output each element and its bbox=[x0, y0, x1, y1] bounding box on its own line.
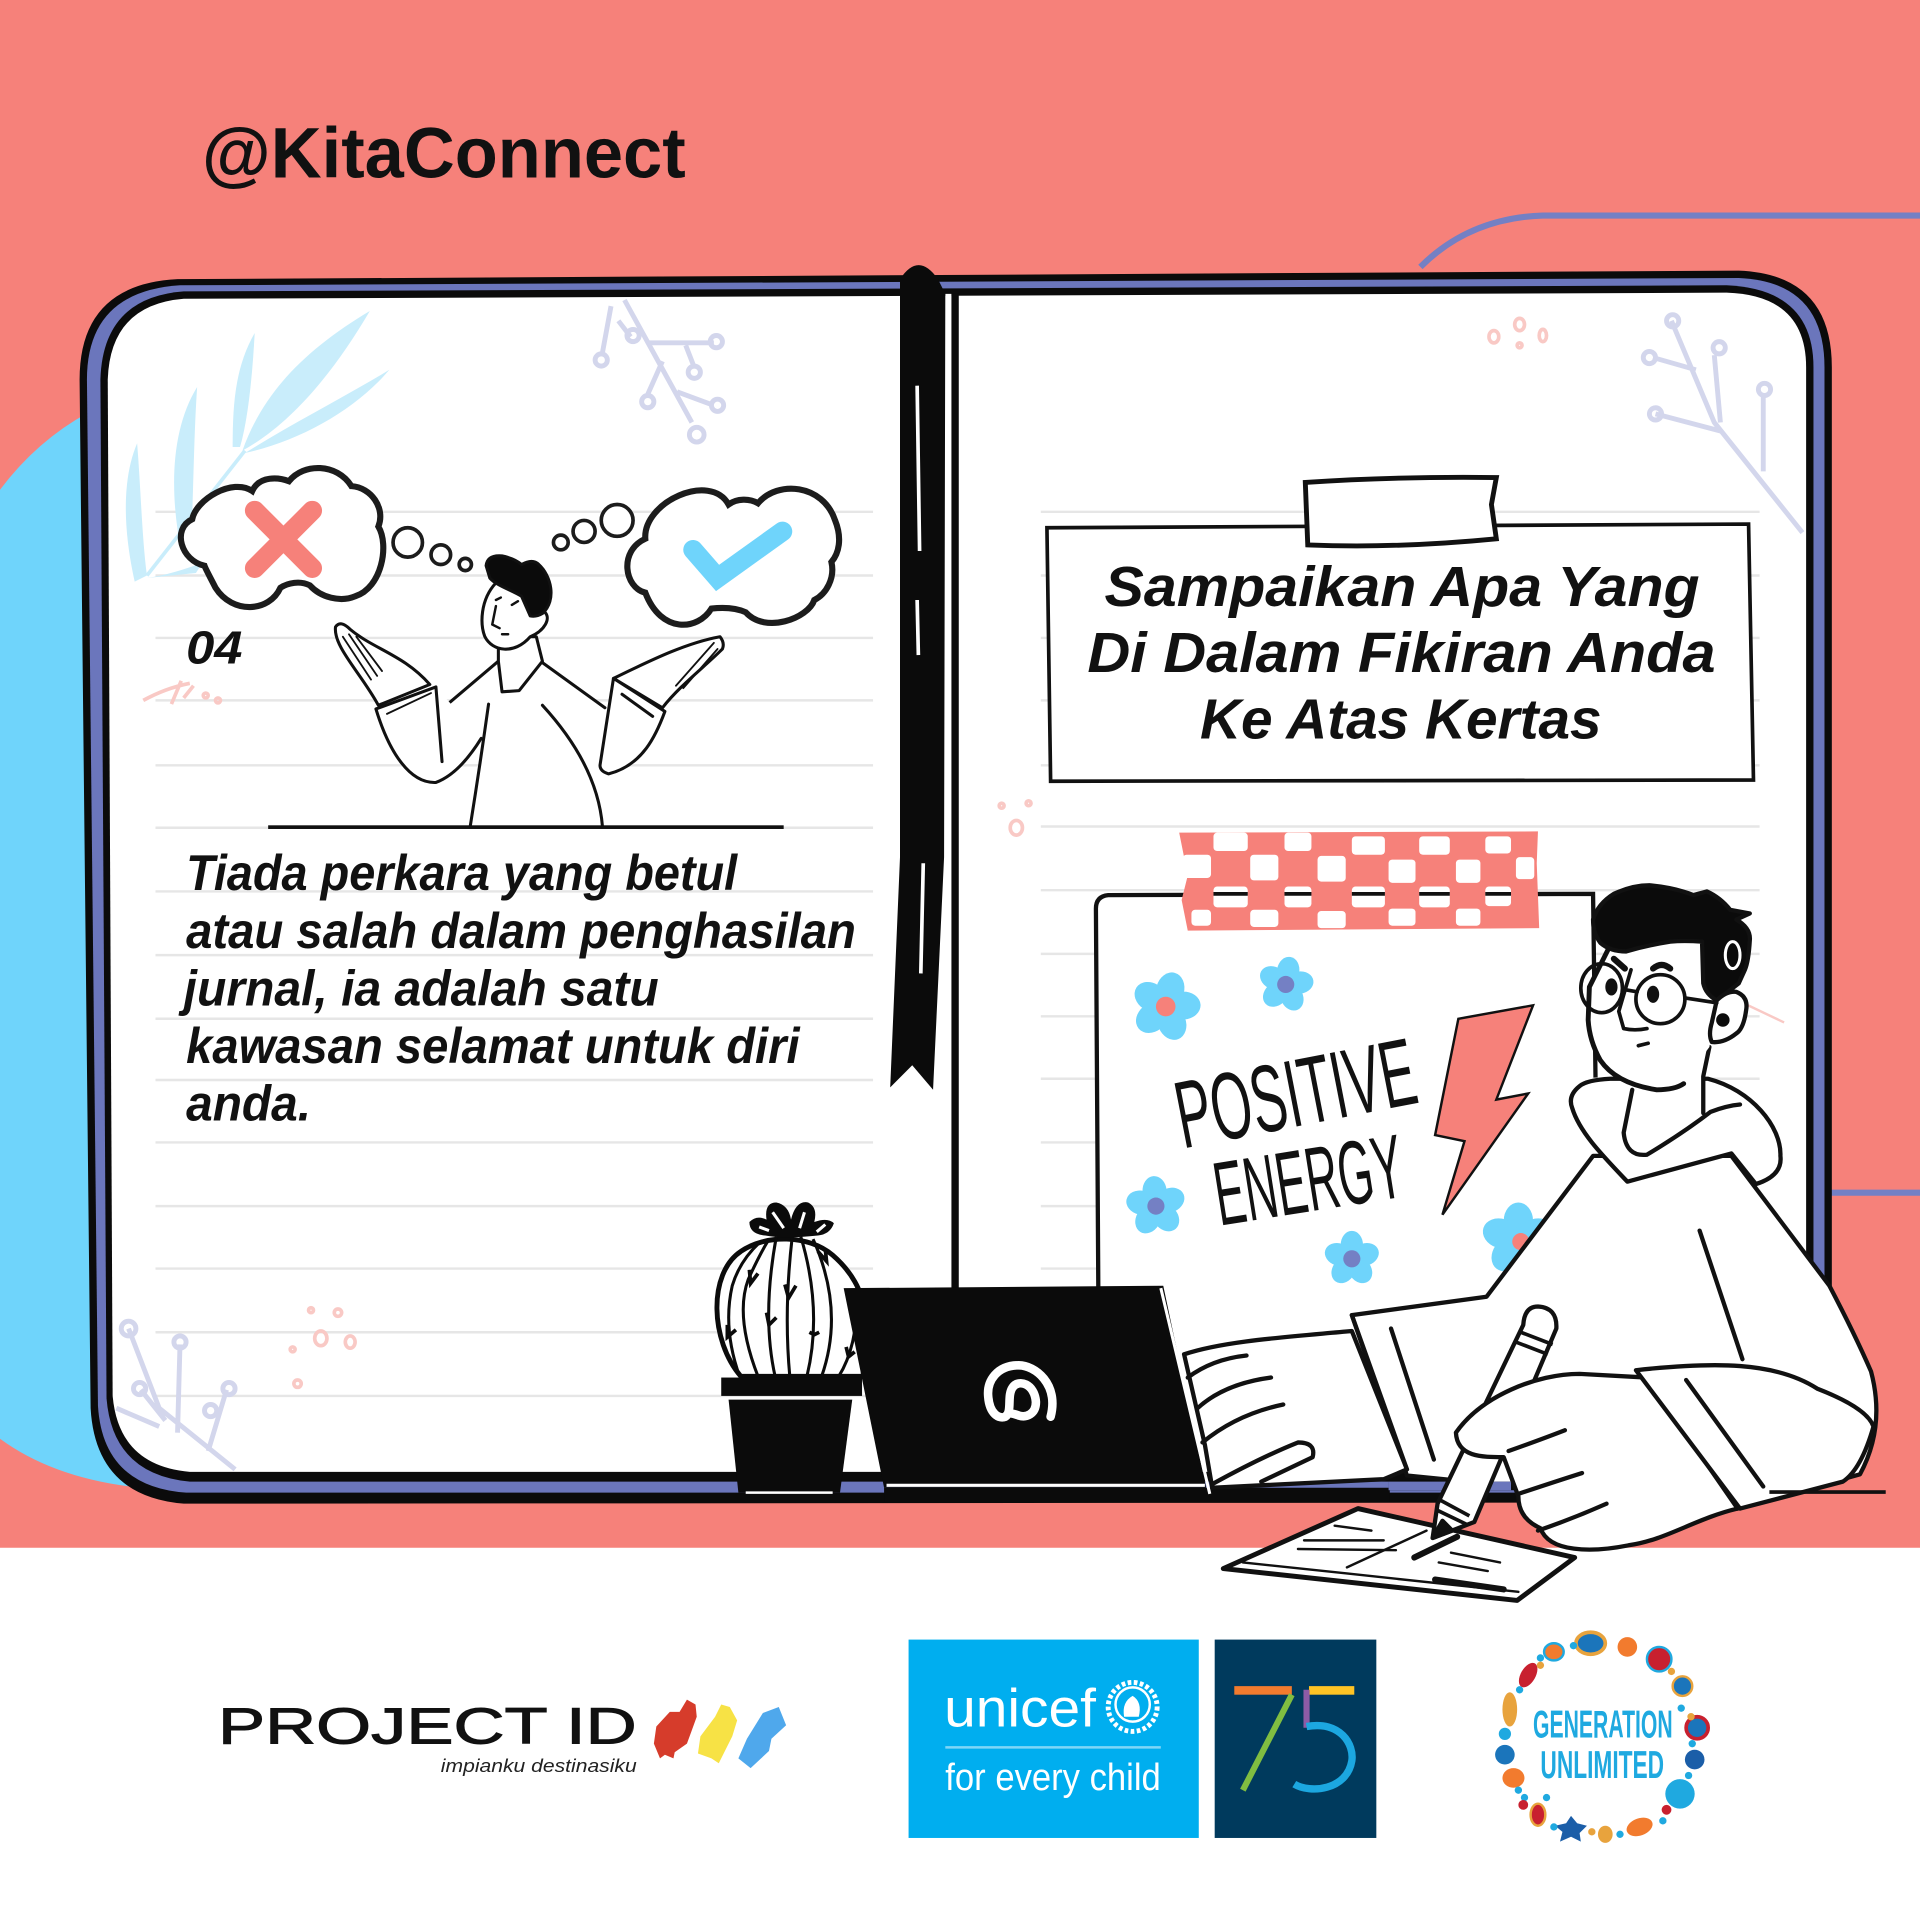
glasses bbox=[1581, 964, 1717, 1024]
face details bbox=[1605, 959, 1670, 1046]
body paragraph: jurnal, ia adalah satu bbox=[178, 960, 659, 1016]
section number: 04 bbox=[186, 622, 243, 674]
poster paper bbox=[1096, 894, 1596, 1298]
pen bbox=[1433, 1307, 1556, 1538]
unicef emblem bbox=[1108, 1682, 1157, 1731]
cactus body bbox=[717, 1239, 863, 1376]
laptop logo bbox=[988, 1365, 1052, 1417]
logo: Generation Unlimited bbox=[1495, 1632, 1708, 1843]
body paragraph: kawasan selamat untuk diri bbox=[186, 1018, 801, 1074]
title text: Ke Atas Kertas bbox=[1200, 687, 1602, 750]
laptop bbox=[844, 1286, 1210, 1494]
decoration: lavender twig bottom left bbox=[116, 1321, 235, 1469]
washi tape bbox=[1179, 831, 1539, 931]
desk line bbox=[268, 825, 784, 829]
logo: UNICEF for every child: unicef bbox=[944, 1679, 1097, 1739]
logo: UNICEF for every child bbox=[909, 1640, 1199, 1838]
illustration: person shrugging with thought clouds bbox=[181, 468, 839, 829]
blue background blob bbox=[0, 413, 141, 1488]
neck bbox=[1624, 1047, 1740, 1155]
thought cloud with cross bbox=[181, 468, 383, 607]
handle text: @KitaConnect bbox=[202, 115, 686, 194]
right desk line bbox=[1769, 1490, 1886, 1494]
purple background lines bbox=[1420, 216, 1920, 1193]
hood bbox=[1571, 1079, 1781, 1184]
body paragraph: atau salah dalam penghasilan bbox=[186, 903, 856, 959]
decoration: lavender twig top left bbox=[595, 300, 724, 442]
body paragraph: Tiada perkara yang betul bbox=[186, 845, 738, 901]
desk line bbox=[884, 1482, 1516, 1502]
thought bubbles left bbox=[393, 528, 471, 571]
body paragraph bbox=[178, 845, 856, 1131]
hoodie body bbox=[1352, 1156, 1876, 1509]
poster lettering: POSITIVE bbox=[1167, 1019, 1425, 1169]
bead ring bbox=[1495, 1632, 1708, 1843]
title tape bbox=[1305, 477, 1496, 546]
body paragraph: anda. bbox=[186, 1075, 311, 1131]
notebook spine and ribbon bbox=[890, 265, 959, 1294]
lightning bolt bbox=[1435, 1005, 1533, 1215]
flowers on poster bbox=[1120, 952, 1558, 1288]
person writing at desk bbox=[1352, 885, 1876, 1509]
logo: Project ID: PROJECT ID bbox=[218, 1697, 637, 1755]
hoodie fold bbox=[1700, 1231, 1742, 1359]
open notebook bbox=[80, 271, 1832, 1504]
logo: UNICEF 75 bbox=[1215, 1640, 1376, 1838]
title box bbox=[1047, 524, 1753, 781]
thought cloud with check bbox=[627, 489, 839, 625]
ear bbox=[1710, 992, 1747, 1042]
face outline bbox=[1588, 950, 1684, 1090]
title text bbox=[1087, 555, 1716, 750]
notebook on desk bbox=[1223, 1509, 1575, 1600]
head bbox=[1588, 937, 1717, 1090]
decoration: pink sprigs and dots bbox=[143, 318, 1784, 1387]
thought bubbles right bbox=[553, 504, 633, 550]
cactus pot bbox=[721, 1378, 862, 1396]
logo: Project ID bbox=[218, 1697, 786, 1776]
logo: UNICEF for every child: for every child bbox=[945, 1757, 1161, 1799]
cactus plant bbox=[717, 1202, 863, 1493]
hair bbox=[1593, 885, 1750, 1000]
logo: Generation Unlimited: GENERATION bbox=[1533, 1704, 1673, 1747]
left hand on laptop bbox=[1184, 1315, 1434, 1488]
ear swirl bbox=[1725, 942, 1740, 969]
logo: Project ID: impianku destinasiku bbox=[441, 1755, 637, 1776]
title text: Sampaikan Apa Yang bbox=[1104, 555, 1700, 618]
poster lettering: ENERGY bbox=[1207, 1116, 1410, 1245]
title text: Di Dalam Fikiran Anda bbox=[1087, 621, 1716, 684]
purple desk strip bbox=[1389, 1482, 1511, 1490]
writing hand and sleeve bbox=[1456, 1365, 1873, 1550]
logo: Generation Unlimited: UNLIMITED bbox=[1540, 1744, 1664, 1787]
ruled lines bbox=[156, 512, 1760, 1396]
decoration: lavender twig top right bbox=[1643, 315, 1802, 533]
shrugging figure bbox=[335, 556, 723, 827]
cactus flower bbox=[749, 1202, 834, 1237]
decoration: pale blue leaves bbox=[126, 311, 389, 582]
poster lettering bbox=[1167, 1019, 1425, 1245]
